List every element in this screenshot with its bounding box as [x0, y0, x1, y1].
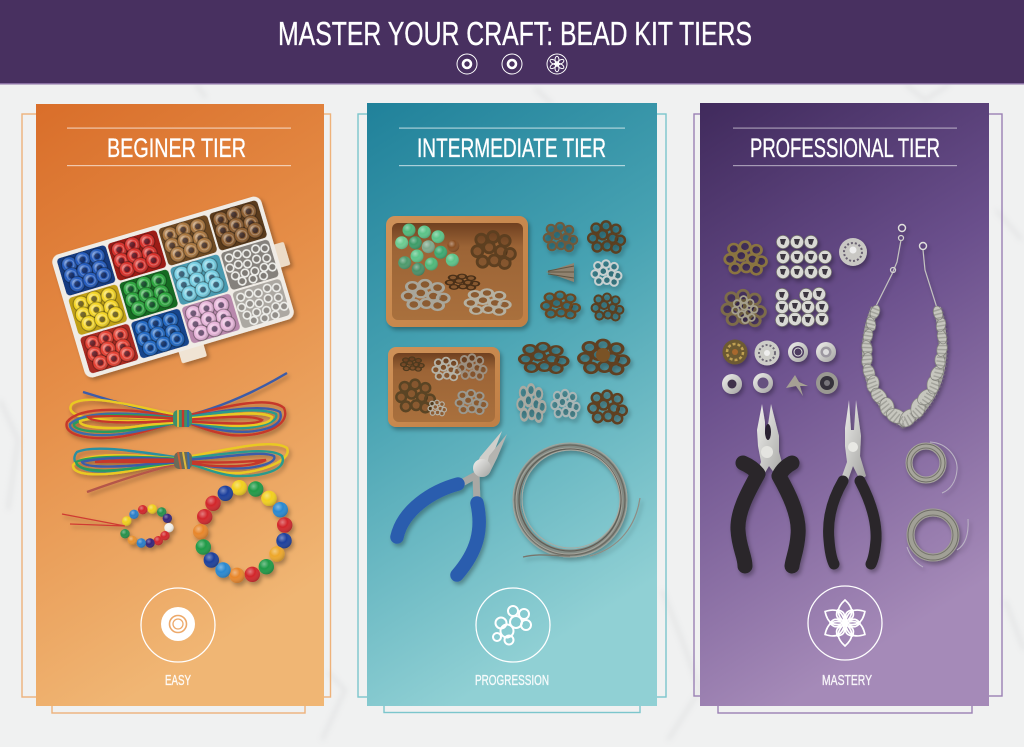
- label: progression: PROGRESSION: [475, 672, 549, 689]
- rainbow cord lower: [73, 444, 288, 492]
- label: easy: EASY: [165, 672, 191, 689]
- icon: progression rings: [476, 588, 550, 662]
- label: mastery: MASTERY: [822, 672, 872, 689]
- wooden tray large: [386, 216, 528, 327]
- icon: mastery flower: [808, 586, 882, 660]
- rainbow cord upper: [66, 373, 287, 438]
- loose findings: [517, 221, 629, 423]
- title: MASTER YOUR CRAFT: BEAD KIT TIERS: [278, 15, 752, 52]
- panel: beginner tier: [22, 104, 330, 713]
- blue pliers: [397, 431, 507, 575]
- large beaded bracelet: [193, 480, 292, 583]
- cord knot upper: [173, 410, 192, 427]
- panel: professional tier: [694, 103, 1002, 713]
- bead organizer box: [50, 192, 309, 391]
- heading: beginner tier: BEGINER TIER: [107, 133, 246, 163]
- small beaded bracelet: [62, 504, 174, 548]
- cord knot lower: [174, 452, 192, 469]
- heading: intermediate tier: INTERMEDIATE TIER: [417, 133, 606, 163]
- header icons: [457, 54, 567, 74]
- header banner: [0, 0, 1024, 84]
- black pliers left: [738, 404, 798, 566]
- icon: easy bead: [141, 588, 215, 662]
- panel: intermediate tier: [358, 103, 666, 712]
- wooden tray small: [388, 347, 500, 427]
- wire coils: [907, 442, 968, 567]
- wire coil: [513, 443, 640, 557]
- black pliers right: [829, 400, 876, 564]
- metal findings: [722, 235, 867, 396]
- silver braided necklace: [860, 224, 949, 430]
- heading: professional tier: PROFESSIONAL TIER: [750, 133, 940, 163]
